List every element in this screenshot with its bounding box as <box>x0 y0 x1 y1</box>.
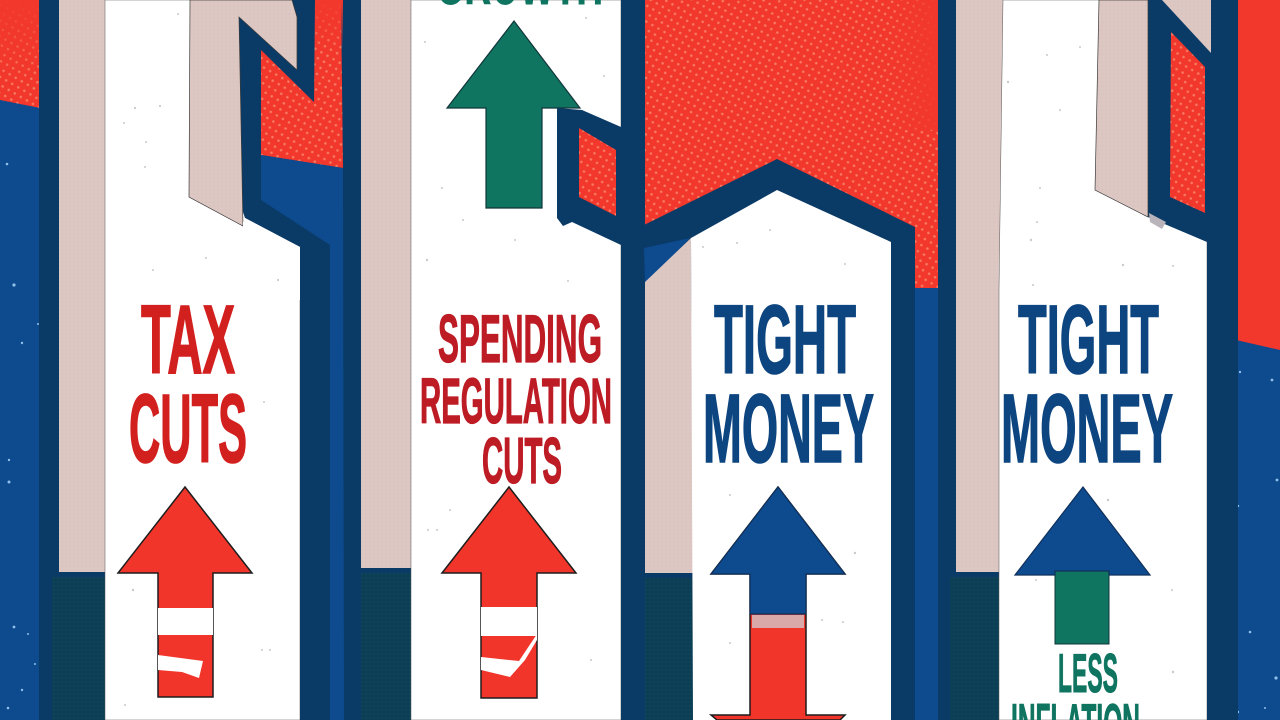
panel: spending and regulation cuts: SPENDING <box>438 301 602 377</box>
navy bracket with red window <box>557 108 621 245</box>
panel: spending and regulation cuts <box>361 0 645 720</box>
background: left red sky <box>0 0 40 108</box>
pink side strip <box>956 0 1003 572</box>
caption: less inflation, clipped <box>1011 642 1140 720</box>
arrow: blue and red <box>711 487 845 720</box>
heading: tight money <box>1001 285 1173 483</box>
white house column <box>691 190 891 720</box>
paper speckles <box>123 13 279 706</box>
arrow: red up with white bands <box>118 487 252 697</box>
red window <box>1170 32 1205 213</box>
panel: spending and regulation cuts: REGULATION <box>420 365 612 437</box>
right navy edge <box>621 0 645 720</box>
arrow: red up with white bands <box>442 487 576 698</box>
background: central red halftone sky <box>640 0 938 288</box>
background: right red sky <box>1236 0 1280 350</box>
caption: less inflation, clipped: LESS <box>1058 642 1118 704</box>
blue window <box>261 155 344 720</box>
background: left blue starfield <box>6 163 39 709</box>
navy structure at the right <box>239 0 344 720</box>
arrow: blue head, green shaft <box>1015 487 1150 644</box>
paper speckles <box>1007 46 1174 673</box>
heading: tax cuts <box>129 285 247 483</box>
teal base strip <box>52 572 105 720</box>
panel: tight money, less inflation <box>950 0 1238 720</box>
panel: tight money <box>644 159 915 720</box>
paper speckles <box>424 17 605 661</box>
white column <box>999 0 1207 720</box>
heading: spending regulation cuts: CUTS <box>482 424 562 497</box>
folded pink flap <box>189 0 297 226</box>
heading: spending regulation cuts <box>420 301 612 497</box>
heading: tight money <box>703 285 874 483</box>
panel: tax cuts: CUTS <box>129 374 247 483</box>
pink corner <box>1162 0 1211 53</box>
panel: tight money: MONEY <box>703 374 874 483</box>
white column <box>411 0 621 720</box>
teal base strip <box>645 578 693 720</box>
right navy edge <box>344 0 361 720</box>
pink side strip <box>645 238 693 573</box>
panel: tax cuts <box>39 0 361 720</box>
pink side strip <box>361 0 411 568</box>
paper speckles <box>702 229 856 644</box>
heading: tight money: TIGHT <box>714 285 856 394</box>
navy house outline <box>644 159 915 720</box>
teal base strip <box>950 572 1000 720</box>
teal base strip <box>361 568 411 720</box>
white column <box>105 0 300 720</box>
background: right blue starfield <box>1237 371 1278 713</box>
heading: tax cuts: TAX <box>141 285 235 394</box>
red window <box>261 0 343 168</box>
blue wedge <box>644 238 690 285</box>
flap torn tip <box>1149 213 1166 229</box>
arrow: green up <box>447 21 580 208</box>
white lower filler <box>243 218 300 300</box>
navy bracket <box>1148 0 1238 720</box>
column frame: navy <box>39 0 59 720</box>
folded pink flap <box>1095 0 1148 217</box>
blue and navy divider with lower blue <box>915 0 957 720</box>
pink side strip <box>59 0 105 572</box>
